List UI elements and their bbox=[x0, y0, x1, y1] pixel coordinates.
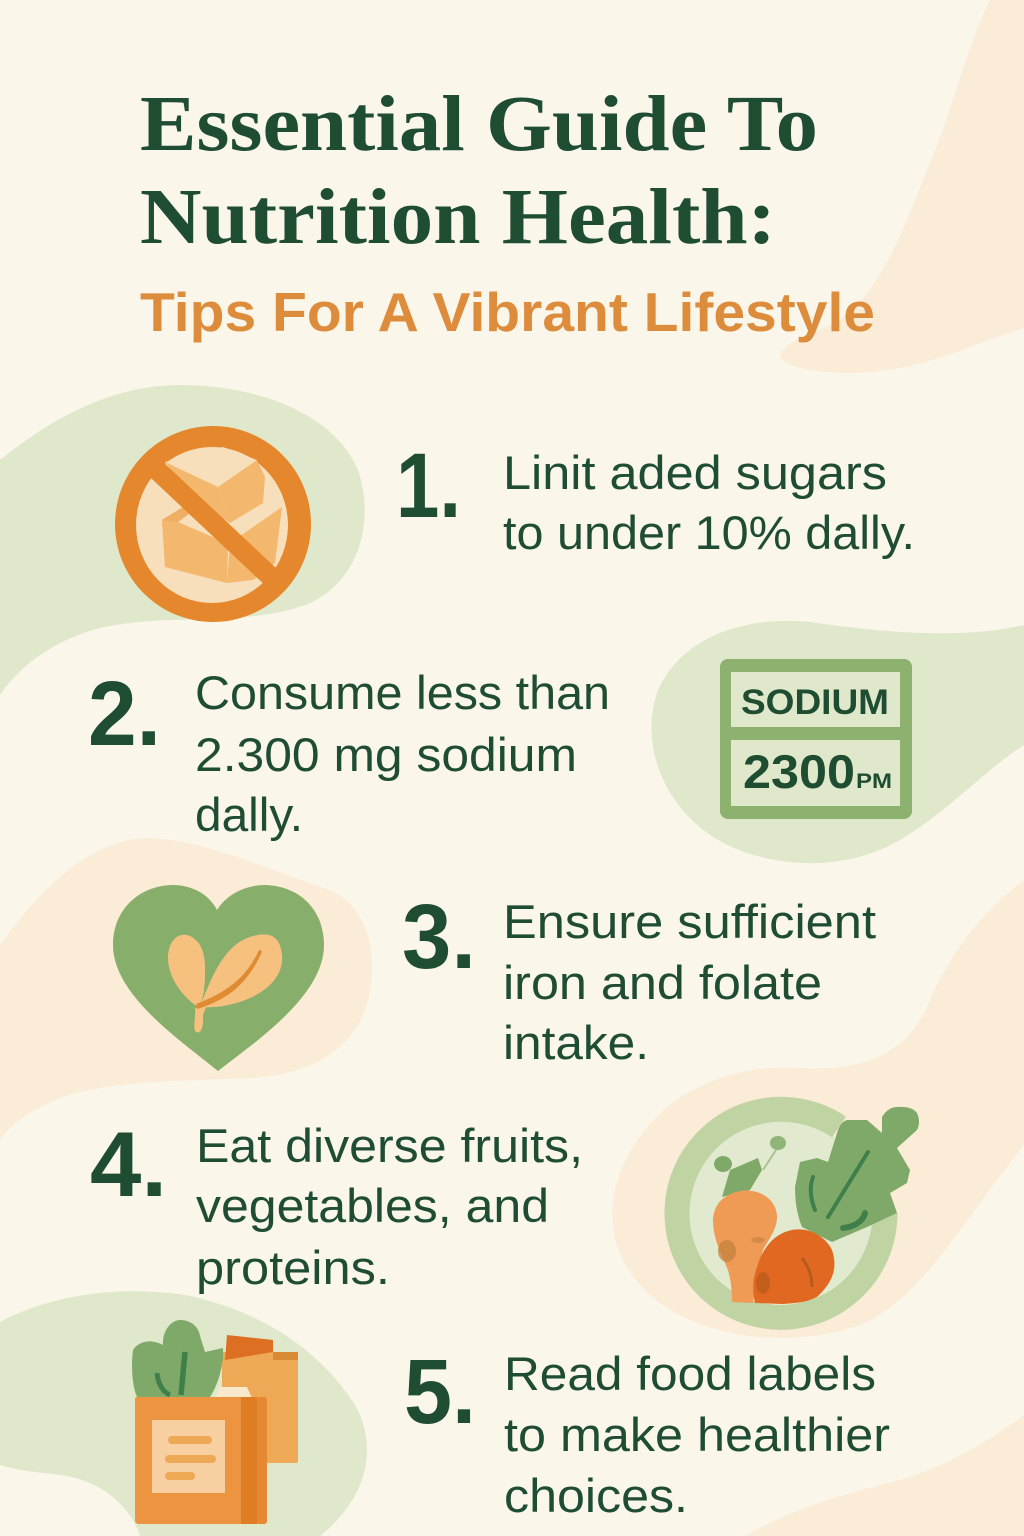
icon: sodium label: PM bbox=[856, 770, 892, 793]
icon: vegetable plate bbox=[677, 1107, 919, 1317]
number 1: 1. bbox=[396, 435, 461, 537]
background blob: peach behind item 3 bbox=[0, 838, 372, 1140]
icon: sodium label bbox=[720, 659, 912, 819]
number 5: 5. bbox=[404, 1341, 476, 1443]
background blob: green behind item 5 bbox=[0, 1291, 367, 1536]
icon: heart with leaf bbox=[113, 885, 324, 1071]
text: item 2: 2.300 mg sodium bbox=[195, 728, 577, 781]
icon: sodium label: 2300 bbox=[743, 745, 855, 798]
text: item 5: choices. bbox=[504, 1469, 688, 1522]
text: item 1 bbox=[503, 446, 915, 559]
number 2: 2. bbox=[88, 663, 161, 765]
title: Essential Guide To bbox=[140, 81, 818, 168]
text: item 3: iron and folate bbox=[503, 956, 822, 1009]
text: item 1: Linit aded sugars bbox=[503, 446, 887, 499]
text: item 2 bbox=[195, 666, 610, 841]
text: item 4: proteins. bbox=[196, 1241, 390, 1294]
background blob: peach behind item 4 bbox=[612, 880, 1024, 1338]
text: item 3: Ensure sufficient bbox=[503, 895, 876, 948]
text: item 3: intake. bbox=[503, 1016, 649, 1069]
background blob: top right peach bbox=[780, 0, 1024, 373]
text: item 1: to under 10% dally. bbox=[503, 506, 915, 559]
text: item 2: Consume less than bbox=[195, 666, 610, 719]
background blob: peach bottom right bbox=[745, 1415, 1024, 1536]
text: item 4: Eat diverse fruits, bbox=[196, 1119, 583, 1172]
number 3: 3. bbox=[402, 886, 476, 988]
text: item 5: Read food labels bbox=[504, 1347, 876, 1400]
title: Nutrition Health: bbox=[140, 174, 776, 261]
icon: food label book and bag bbox=[132, 1320, 298, 1524]
text: item 5: to make healthier bbox=[504, 1408, 890, 1461]
icon: no sugar cubes bbox=[115, 426, 311, 622]
subtitle: Tips For A Vibrant Lifestyle bbox=[140, 281, 875, 343]
icon: sodium label: SODIUM bbox=[741, 683, 889, 722]
number 4: 4. bbox=[90, 1114, 167, 1216]
title bbox=[140, 81, 818, 261]
background blob: green behind item 1 bbox=[0, 385, 365, 695]
background blob: green behind item 2 bbox=[651, 621, 1024, 863]
text: item 4: vegetables, and bbox=[196, 1179, 549, 1232]
text: item 3 bbox=[503, 895, 876, 1069]
text: item 5 bbox=[504, 1347, 890, 1522]
text: item 2: dally. bbox=[195, 788, 303, 841]
text: item 4 bbox=[196, 1119, 583, 1294]
